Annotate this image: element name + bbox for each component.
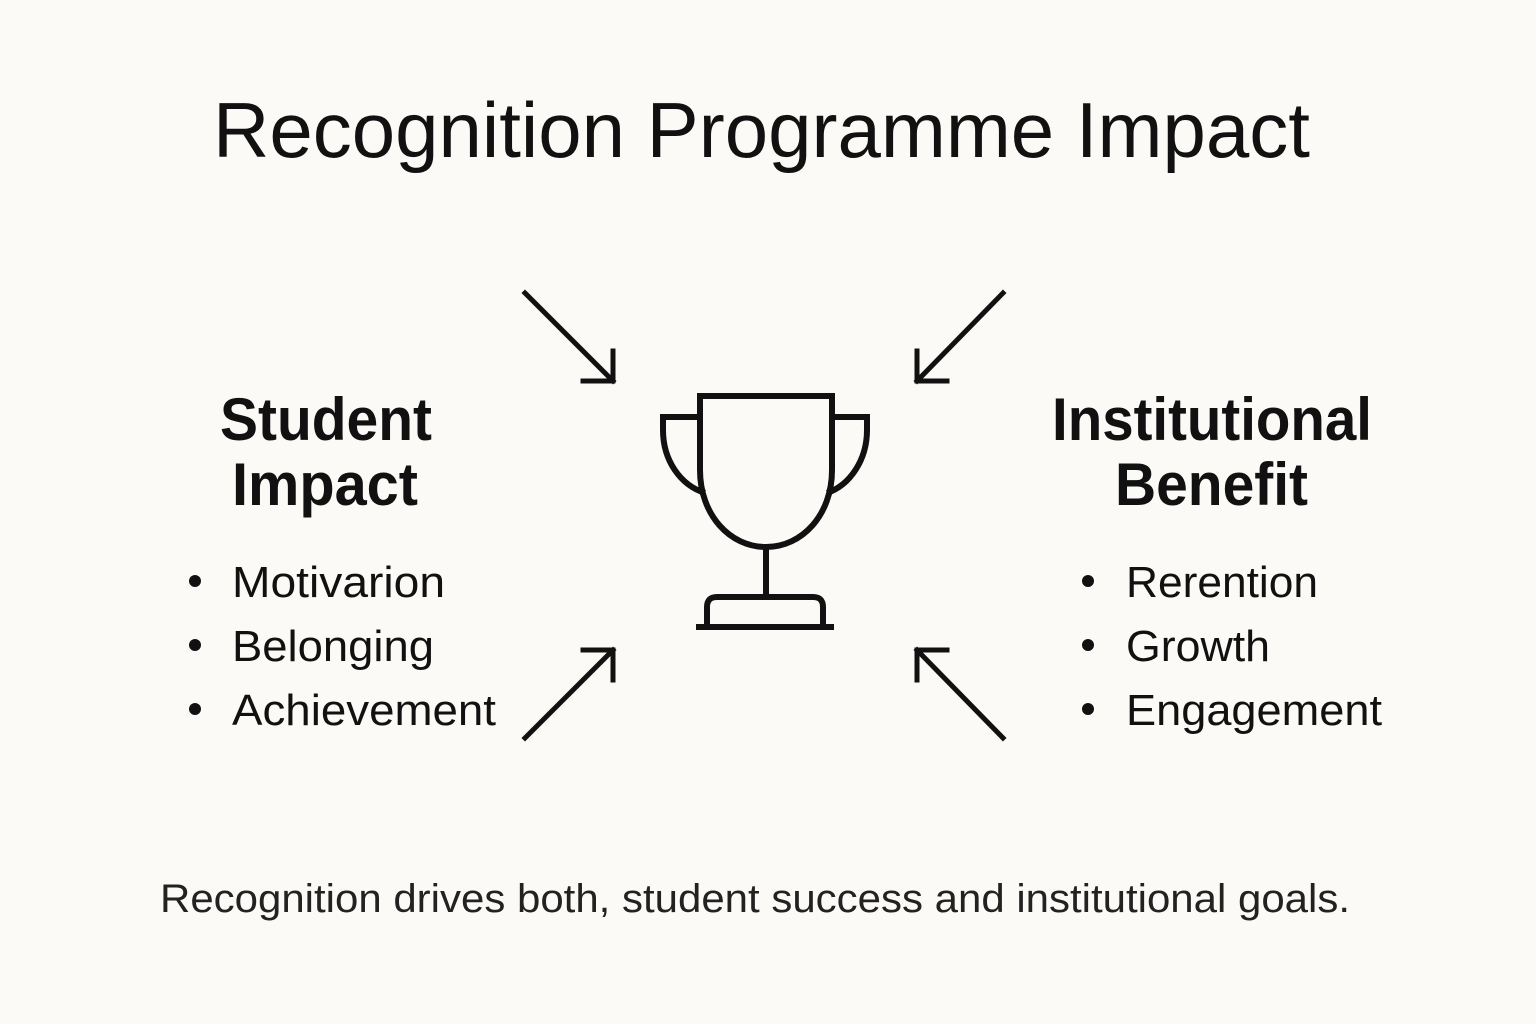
list: student bullets: Achievement — [232, 686, 496, 735]
heading: student impact: Impact — [232, 451, 418, 518]
list: student bullets — [189, 558, 496, 735]
title: Recognition Programme Impact — [213, 86, 1310, 174]
heading: institutional benefit: Institutional — [1052, 386, 1372, 453]
heading: student impact — [220, 386, 432, 518]
list: institutional bullets — [1082, 558, 1382, 735]
arrow: top left — [525, 293, 613, 381]
list: institutional bullets: Growth — [1126, 622, 1270, 671]
arrows — [525, 293, 1003, 738]
icon: trophy — [663, 396, 867, 627]
list: institutional bullets: Engagement — [1126, 686, 1382, 735]
heading: institutional benefit: Benefit — [1115, 451, 1308, 518]
list: institutional bullets: Rerention — [1126, 558, 1318, 607]
arrow: top right — [917, 293, 1003, 381]
arrow: bottom right — [917, 650, 1003, 738]
heading: student impact: Student — [220, 386, 432, 453]
footer caption: Recognition drives both, student success and institutional goals. — [160, 877, 1350, 921]
arrow: bottom left — [525, 650, 613, 738]
heading: institutional benefit — [1052, 386, 1372, 518]
panel: student impact — [189, 386, 496, 735]
panel: institutional benefit — [1052, 386, 1382, 735]
list: student bullets: Belonging — [232, 622, 434, 671]
list: student bullets: Motivarion — [232, 558, 445, 607]
